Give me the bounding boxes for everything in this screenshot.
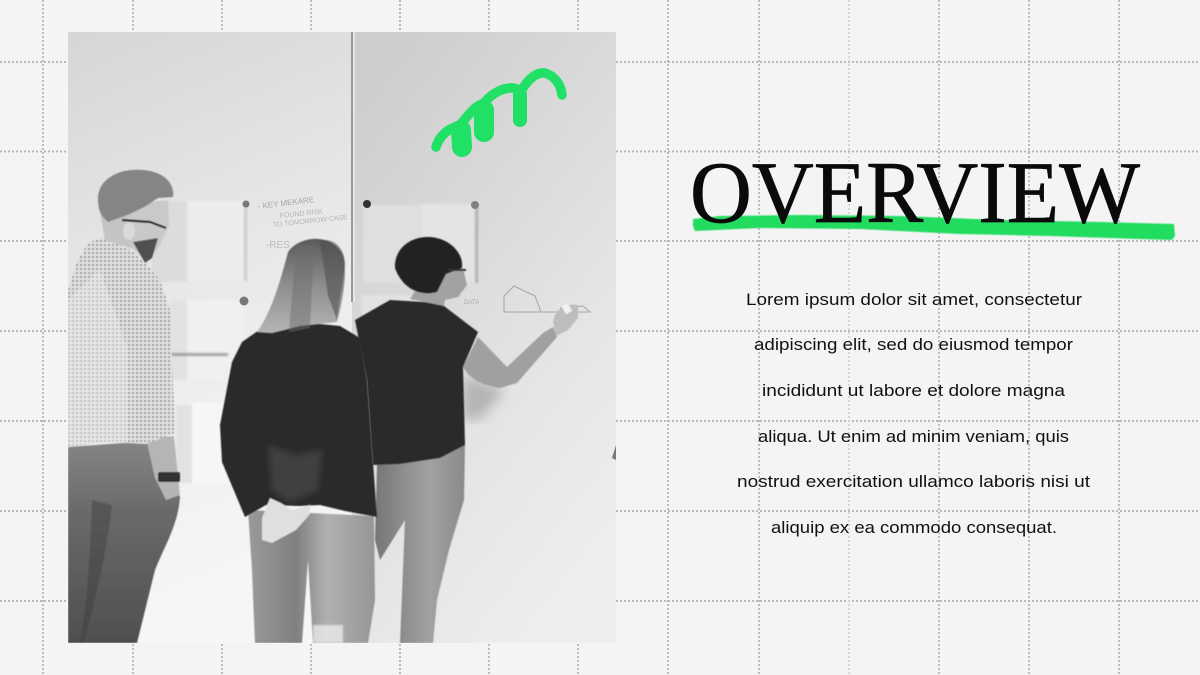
handwriting on board: - KEY MEKARE [257,195,315,211]
handwriting on board: FOUND RISK [279,208,323,220]
body text: incididunt ut labore et dolore magna [762,381,1066,400]
drawing on board [504,286,590,312]
ear [123,222,135,240]
pinned papers [152,201,478,483]
trousers [68,441,180,643]
photo: team at whiteboard [68,32,616,643]
person: woman with hands behind back [220,239,377,643]
wall edge mark [612,445,616,460]
magnets [240,200,479,306]
jeans [248,510,375,643]
body text: Lorem ipsum dolor sit amet, consectetur [746,290,1082,309]
sweater [220,322,377,517]
whiteboard wall [68,32,616,643]
hair [257,239,345,333]
watch [158,472,180,482]
hair [98,170,173,222]
glasses [122,220,166,228]
marker [562,303,572,314]
arm [463,327,557,388]
leggings [375,443,465,643]
body text: adipiscing elit, sed do eiusmod tempor [754,335,1073,354]
handwriting on board: TO TOMORROW CASE [272,214,349,229]
person: woman drawing [355,237,578,643]
neck [100,213,132,248]
body text: aliqua. Ut enim ad minim veniam, quis [758,427,1069,446]
handwriting on board [257,195,479,306]
beard [133,238,158,263]
top [355,300,478,465]
body text: nostrud exercitation ullamco laboris nisi ut [737,472,1090,491]
title: underline brush stroke [693,215,1175,240]
icon: green scribble [436,73,562,147]
title: OVERVIEW [690,145,1140,242]
handwriting on board: -RES [266,240,290,251]
handwriting on board: DATA [464,300,479,306]
body text: aliquip ex ea commodo consequat. [771,518,1057,537]
hair [395,237,462,293]
shirt [68,237,175,447]
hand [553,305,578,336]
face [130,200,169,254]
highlight at bottom [313,625,343,643]
body text [737,290,1090,537]
face and neck [410,268,467,306]
glasses [447,269,466,271]
person: man in checked shirt [68,170,180,643]
clasped hands [262,498,310,543]
arm shadow [462,375,505,420]
forearm and hand [146,436,180,500]
